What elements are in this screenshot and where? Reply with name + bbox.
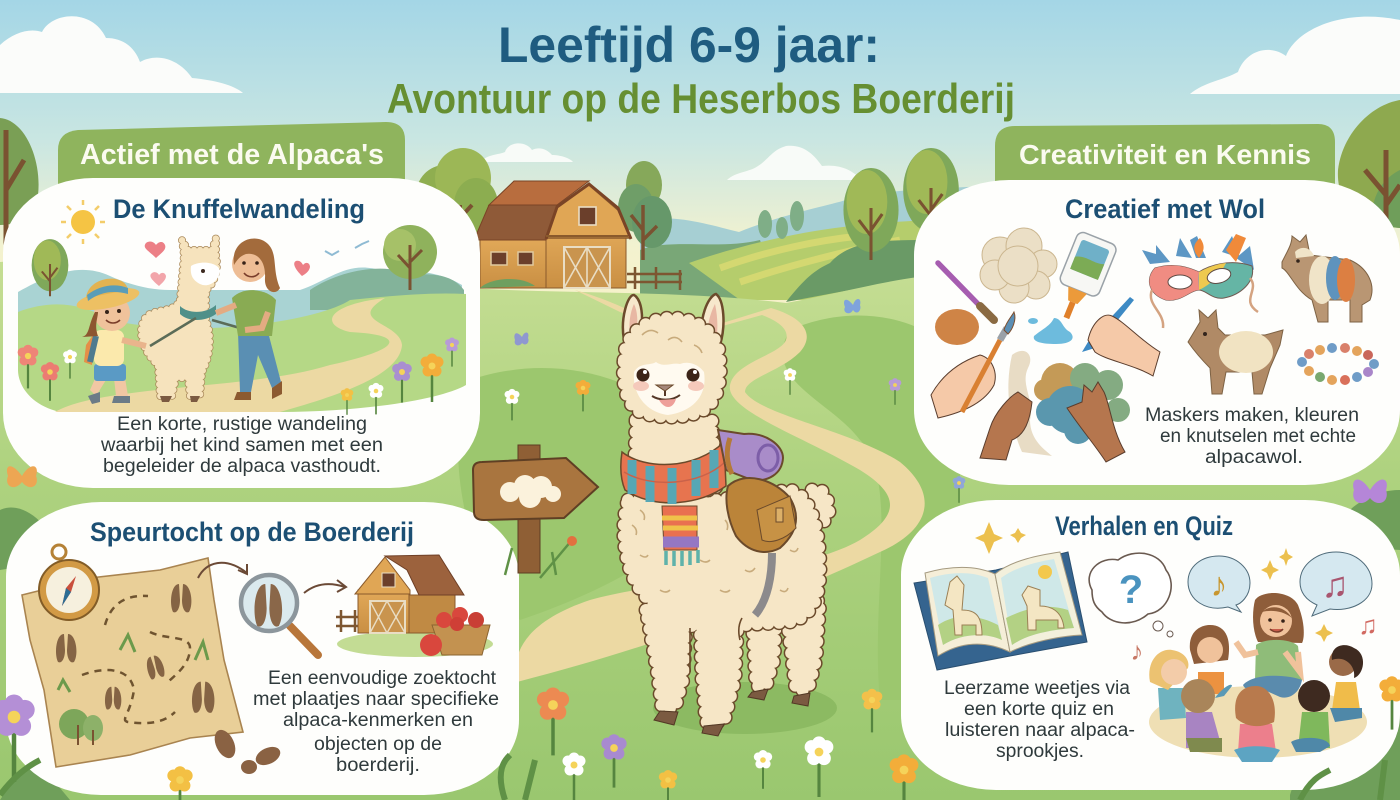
- description text: met plaatjes naar specifieke: [253, 689, 499, 710]
- clouds top left: [0, 16, 243, 93]
- thought bubble with question mark: [1089, 553, 1173, 637]
- guide: [216, 239, 282, 400]
- small trees on the map: [59, 709, 103, 745]
- neck: [634, 420, 716, 490]
- back legs: [752, 600, 820, 690]
- small clouds in the distance: [480, 143, 862, 180]
- hand with marker: [1082, 297, 1160, 376]
- small notes: ♪: [1130, 636, 1144, 666]
- hands felting colored wool: [980, 351, 1130, 462]
- tree, far left: [0, 118, 39, 245]
- thought bubble with question mark: ?: [1119, 568, 1143, 612]
- darker grass patches: [458, 316, 960, 700]
- walking scene illustration: [18, 225, 466, 415]
- heading: De Knuffelwandeling: De Knuffelwandeling: [113, 194, 365, 224]
- child 1: [1149, 650, 1188, 720]
- paintbrush: [938, 263, 994, 320]
- title: Avontuur op de Heserbos Boerderij: [387, 75, 1015, 122]
- wool tuft: [980, 228, 1057, 303]
- description text: [1145, 405, 1359, 468]
- tree, behind barn: [618, 161, 672, 260]
- description text: Een eenvoudige zoektocht: [268, 668, 497, 689]
- child 6: [1329, 645, 1363, 722]
- description text: alpaca-kenmerken en: [283, 710, 473, 731]
- panel tab: Creativiteit en Kennis: [995, 124, 1335, 196]
- arrow: magnifier to barn: [304, 580, 346, 593]
- music note bubble: [1188, 556, 1250, 612]
- scarf: [621, 442, 726, 503]
- heading: Speurtocht op de Boerderij: Speurtocht op de Boerderij: [90, 517, 414, 547]
- icon: sparkles: [975, 522, 1333, 642]
- music note bubble, second: ♫: [1322, 564, 1348, 605]
- tree, far right: [1338, 100, 1400, 262]
- description text: begeleider de alpaca vasthoudt.: [103, 456, 381, 477]
- paint splash: [1028, 318, 1073, 344]
- orange wool ball: [935, 309, 979, 345]
- panel tab: Creativiteit en Kennis: Creativiteit en Kennis: [1019, 139, 1311, 170]
- small craft alpaca: [1188, 310, 1283, 394]
- strap: [755, 553, 772, 615]
- heading: Verhalen en Quiz: Verhalen en Quiz: [1055, 511, 1233, 541]
- storyteller: [1236, 593, 1304, 698]
- clouds top right: [1190, 17, 1400, 94]
- description text: Maskers maken, kleuren: [1145, 405, 1359, 426]
- treasure map: [22, 558, 243, 767]
- description text: Een korte, rustige wandeling: [117, 414, 367, 435]
- music note bubble, second: [1300, 552, 1372, 616]
- compass: [39, 545, 99, 620]
- glue bottle: [1047, 230, 1118, 326]
- panel: Speurtocht op de Boerderij: [6, 502, 519, 795]
- description text: Leerzame weetjes via: [944, 678, 1130, 699]
- hand with brush: [931, 312, 1015, 418]
- panel: De Knuffelwandeling: [3, 178, 480, 488]
- small notes: ♫: [1358, 610, 1378, 640]
- description text: alpacawol.: [1205, 447, 1303, 468]
- barn: [474, 181, 682, 290]
- hearts and birds: [145, 242, 310, 286]
- description text: en knutselen met echte: [1160, 426, 1356, 447]
- small barn with apple basket: [336, 555, 493, 657]
- description text: boerderij.: [336, 755, 420, 776]
- alpaca: [141, 238, 247, 402]
- body: [624, 490, 820, 722]
- meadow ground: [0, 257, 1400, 800]
- head: [623, 318, 720, 417]
- backpack: [726, 478, 796, 552]
- small notes: [1130, 610, 1378, 666]
- front hooves: [654, 711, 724, 736]
- panel: Creatief met Wol: [914, 180, 1400, 485]
- description text: sprookjes.: [996, 741, 1084, 762]
- bead bracelet: [1297, 343, 1379, 385]
- description text: luisteren naar alpaca-: [945, 720, 1135, 741]
- description text: [100, 414, 383, 477]
- children listening to a storyteller: [1149, 593, 1367, 762]
- bedroll: [718, 430, 783, 480]
- magnifying glass: [241, 575, 318, 655]
- shadow: [653, 682, 837, 734]
- description text: een korte quiz en: [964, 699, 1114, 720]
- description text: [944, 678, 1135, 762]
- child 4: [1234, 686, 1280, 762]
- panel: Verhalen en Quiz: [901, 500, 1400, 790]
- footprints below the map: [211, 727, 283, 774]
- background trees: [0, 100, 1400, 262]
- arrow: map to magnifier: [198, 563, 247, 578]
- face: [634, 362, 705, 415]
- flowers: [18, 345, 38, 388]
- colorful mask: [1142, 234, 1258, 328]
- distant hills: [640, 186, 1000, 302]
- winding path: [516, 290, 925, 682]
- tree, right: [383, 225, 437, 290]
- foreground flowers and grass: [0, 368, 1400, 800]
- description text: objecten op de: [314, 734, 442, 755]
- title: [387, 17, 1015, 122]
- panel tab: Actief met de Alpaca's: [58, 122, 405, 196]
- child: [75, 279, 146, 404]
- woolly alpaca with colored wool: [1282, 235, 1372, 322]
- tail: [812, 489, 829, 522]
- child 3: [1181, 679, 1222, 752]
- child 2: [1190, 625, 1232, 698]
- icon: sun: [61, 200, 105, 244]
- music note bubble: ♪: [1210, 566, 1228, 604]
- heading: Creatief met Wol: Creatief met Wol: [1065, 194, 1265, 224]
- description text: [253, 668, 499, 776]
- back hooves: [748, 689, 810, 706]
- dark bushes at the edges: [0, 490, 1400, 800]
- open story book: [914, 552, 1087, 670]
- panel tab: Actief met de Alpaca's: Actief met de Alpaca's: [80, 139, 384, 171]
- title: Leeftijd 6-9 jaar:: [498, 17, 880, 73]
- central alpaca: [621, 294, 837, 736]
- butterflies: [7, 299, 1387, 503]
- description text: waarbij het kind samen met een: [100, 435, 383, 456]
- ears: [623, 294, 723, 345]
- tree, round left: [416, 148, 498, 242]
- wooden signpost: [473, 445, 598, 578]
- background sky: [0, 0, 1400, 310]
- child 5: [1291, 680, 1330, 752]
